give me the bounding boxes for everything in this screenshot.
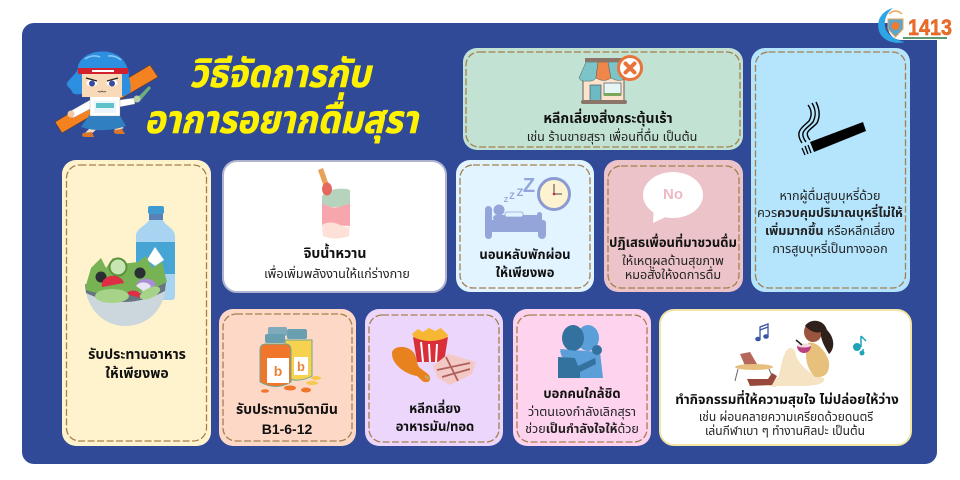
text: avoid triggers: เช่น ร้านขายสุรา เพื่อนที่ดื่ม เป็นต้น	[527, 128, 697, 144]
title	[144, 51, 420, 143]
text: smoking advice: การสูบบุหรี่เป็นทางออก	[772, 240, 888, 256]
text: sleep: นอนหลับพักผ่อน	[479, 247, 571, 262]
panel: smoking	[751, 48, 910, 292]
text: avoid fried food: หลีกเลี่ยง	[409, 399, 461, 416]
icon: vitamin bottles	[260, 327, 321, 393]
text: happy activities	[675, 390, 899, 438]
icon: bed, sleeping person, clock	[485, 175, 570, 239]
panel: sleep	[456, 160, 594, 292]
logo: 1413	[878, 8, 953, 43]
text: avoid fried food: อาหารมัน/ทอด	[396, 419, 474, 434]
text: eat enough	[88, 346, 186, 381]
text: vitamins	[236, 401, 338, 437]
text: sleep: ให้เพียงพอ	[496, 265, 555, 280]
icon: cigarette	[799, 102, 866, 155]
text: avoid triggers: หลีกเลี่ยงสิ่งกระตุ้นเร้า	[543, 108, 673, 127]
panel: vitamins	[219, 309, 356, 446]
icon: fries, chicken, bacon	[392, 328, 476, 385]
text: tell close ones: ช่วยเป็นกำลังใจให้ด้วย	[525, 422, 639, 436]
panel: happy activities	[660, 310, 911, 445]
icon: water bottle	[136, 206, 175, 300]
icon: bed, sleeping person, clock: Z	[504, 197, 509, 204]
icon: woman relaxing with music	[735, 321, 866, 387]
icon: vitamin bottles: b	[297, 359, 305, 374]
icon: speech bubble: No	[663, 186, 683, 203]
panel: sip sweet drinks	[223, 161, 446, 292]
icon: bed, sleeping person, clock: Z	[509, 191, 515, 201]
panel: avoid fried food	[365, 309, 503, 446]
text: smoking advice	[757, 187, 903, 256]
panel: avoid triggers	[463, 48, 743, 150]
text: sip sweet drinks: จิบน้ำหวาน	[303, 243, 366, 261]
text: tell close ones	[525, 386, 639, 436]
text: refuse friends: ให้เหตุผลด้านสุขภาพ	[622, 254, 724, 268]
icon: mascot	[55, 51, 158, 137]
text: tell close ones: บอกคนใกล้ชิด	[543, 386, 621, 401]
text: sip sweet drinks: เพื่อเพิ่มพลังงานให้แก่ร่างกาย	[264, 265, 410, 281]
icon: hugging people	[558, 325, 603, 378]
icon: bed, sleeping person, clock: Z	[523, 175, 535, 197]
text: refuse friends	[609, 233, 737, 282]
icon: shop with cross	[579, 56, 642, 104]
icon: vitamin bottles: b	[274, 363, 282, 379]
text: avoid triggers	[527, 108, 697, 144]
icon: sweet drink	[318, 168, 350, 238]
text: smoking advice: หากผู้ดื่มสูบบุหรี่ด้วย	[779, 187, 881, 203]
text: vitamins: B1-6-12	[262, 421, 312, 437]
panel: tell close ones	[513, 309, 651, 446]
panel: refuse friends	[604, 160, 743, 292]
icon: salad bowl	[85, 256, 167, 326]
text: smoking advice: เพิ่มมากขึ้น หรือหลีกเลี่ยง	[765, 221, 895, 238]
icon: bed, sleeping person, clock: Z	[517, 187, 524, 199]
text: refuse friends: หมอสั่งให้งดการดื่ม	[625, 266, 721, 282]
logo: 1413: 1413	[908, 15, 952, 40]
panel: eat enough	[62, 160, 211, 446]
text: tell close ones: ว่าตนเองกำลังเลิกสุรา	[528, 405, 636, 419]
title: อาการอยากดื่มสุรา	[144, 92, 420, 143]
text: refuse friends: ปฏิเสธเพื่อนที่มาชวนดื่ม	[609, 233, 737, 250]
text: eat enough: รับประทานอาหาร	[88, 346, 186, 362]
text: avoid fried food	[396, 399, 474, 434]
title: วิธีจัดการกับ	[189, 51, 374, 95]
text: happy activities: เล่นกีฬาเบา ๆ ทำงานศิลปะ เป็นต้น	[705, 424, 865, 438]
text: eat enough: ให้เพียงพอ	[105, 365, 169, 381]
text: happy activities: ทำกิจกรรมที่ให้ความสุขใจ ไม่ปล่อยให้ว่าง	[675, 390, 899, 408]
text: sleep	[479, 247, 571, 280]
text: sip sweet drinks	[264, 243, 410, 281]
text: happy activities: เช่น ผ่อนคลายความเครียดด้วยดนตรี	[699, 410, 873, 424]
text: vitamins: รับประทานวิตามิน	[236, 401, 338, 417]
text: smoking advice: ควรควบคุมปริมาณบุหรี่ไม่ให้	[757, 203, 903, 220]
